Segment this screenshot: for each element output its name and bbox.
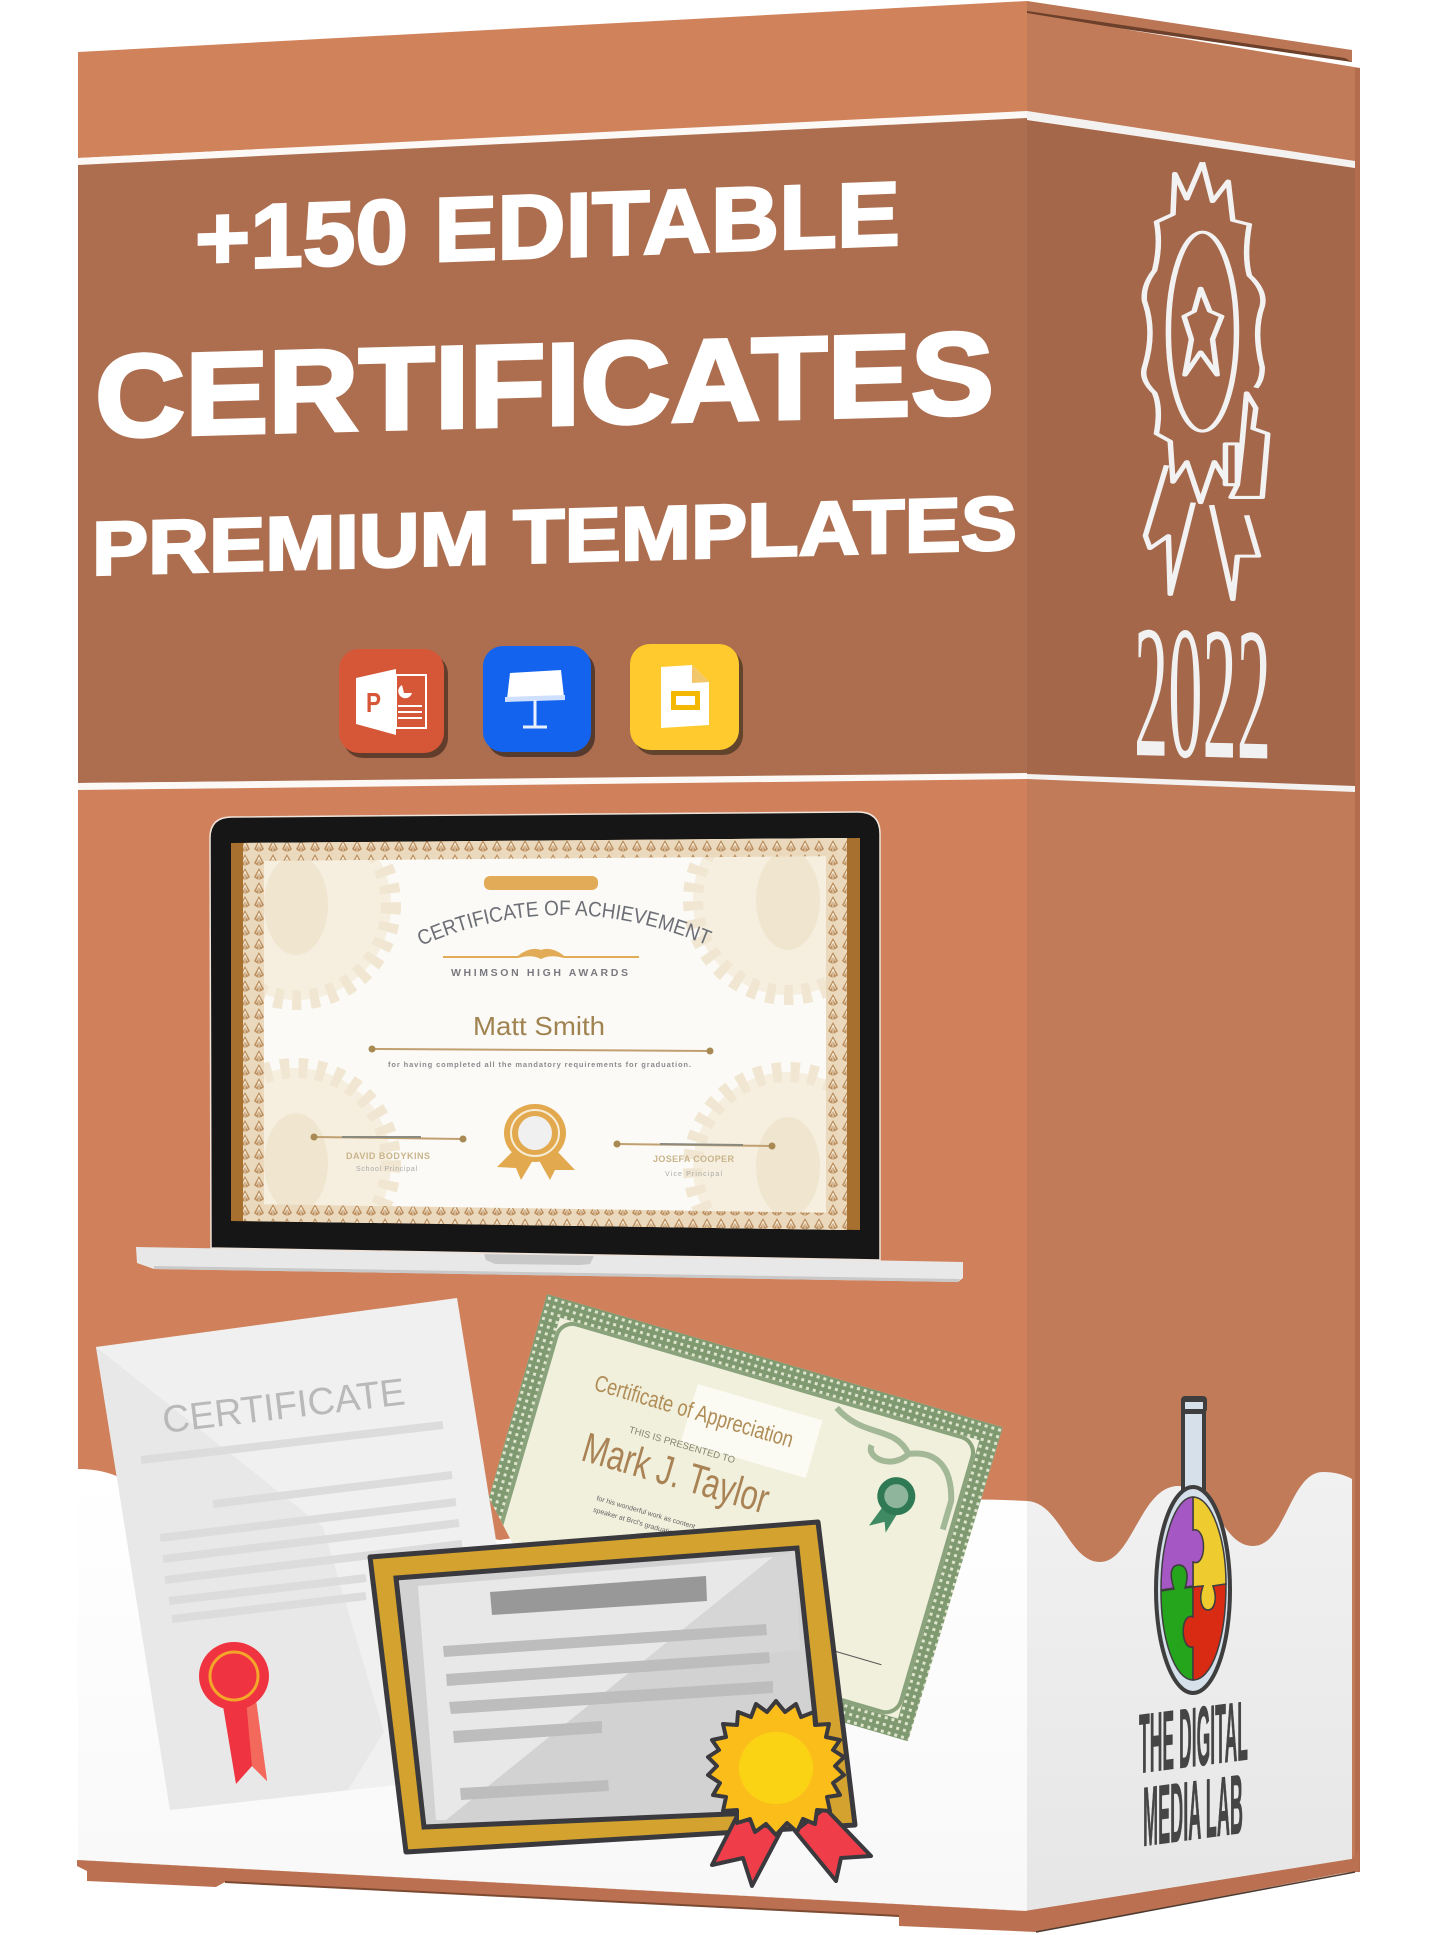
icon: google slides: [630, 644, 743, 755]
appreciation name: Mark J. Taylor: [577, 1423, 775, 1522]
inner circle: [1168, 232, 1236, 431]
green certificate of appreciation: [455, 1294, 1003, 1742]
ribbons: [1145, 465, 1259, 599]
awards line: WHIMSON HIGH AWARDS: [451, 967, 628, 979]
logo: flask with puzzle: [1156, 1396, 1230, 1693]
puzzle: purple: [1161, 1497, 1204, 1590]
gold bar: [484, 876, 598, 890]
right signature: Vice Principal: [665, 1171, 722, 1178]
signature rule: [834, 1651, 881, 1665]
green seal: [869, 1477, 916, 1532]
heading: certificates: CERTIFICATES: [95, 307, 994, 462]
right signature: [614, 1140, 776, 1178]
heading: premium templates: PREMIUM TEMPLATES: [92, 481, 1017, 592]
icon: keynote: [483, 646, 595, 757]
certificate title: CERTIFICATE OF ACHIEVEMENT: [418, 900, 712, 944]
screen: [231, 838, 860, 1230]
right signature: JOSEFA COOPER: [653, 1154, 734, 1164]
icon: award medal with thumbs up: [1144, 162, 1268, 599]
left signature: [310, 1134, 466, 1173]
box: front panel: [78, 1, 1027, 1911]
icon: powerpoint: [339, 649, 448, 758]
star: [1184, 288, 1222, 375]
paper text lines: [141, 1425, 462, 1619]
left signature: School Principal: [356, 1166, 417, 1173]
guilloche corners: [245, 838, 840, 1230]
frame title bar: [490, 1576, 707, 1615]
framed certificate: [370, 1522, 855, 1852]
name rule: [368, 1046, 714, 1054]
puzzle: yellow: [1193, 1497, 1226, 1610]
white highlight: [681, 1384, 823, 1478]
puzzle: red: [1183, 1584, 1226, 1680]
box: top flap: [1027, 1, 1352, 62]
heading: +150 editable: +150 EDITABLE: [195, 164, 900, 290]
paper heading: CERTIFICATE: [160, 1371, 407, 1442]
appreciation heading: Certificate of Appreciation: [592, 1370, 797, 1452]
presented line: THIS IS PRESENTED TO: [628, 1425, 736, 1466]
appreciation description: for his wonderful work as content: [596, 1495, 696, 1531]
puzzle: green: [1161, 1565, 1193, 1680]
description: for having completed all the mandatory requirements for graduation.: [388, 1060, 691, 1069]
left signature: DAVID BODYKINS: [346, 1151, 430, 1161]
seal: [497, 1104, 575, 1180]
certificate of achievement: [243, 838, 847, 1230]
gold rosette with red ribbons: [708, 1701, 871, 1886]
box: bottom flap: [77, 1850, 1359, 1932]
frame text lines: [443, 1624, 773, 1800]
laptop base: [136, 1247, 963, 1282]
thumb: [1225, 393, 1268, 497]
icon: powerpoint: P: [366, 687, 381, 718]
laptop bezel: [210, 812, 880, 1260]
ornament: [443, 950, 639, 958]
scroll ornament: [834, 1406, 954, 1530]
paper certificate with red seal: [96, 1298, 533, 1810]
red seal: [199, 1642, 269, 1784]
laptop: [136, 811, 963, 1282]
badge outline: [1144, 162, 1263, 503]
box: right side panel: [1025, 13, 1360, 1911]
appreciation description: speaker at Brcl's graduation: [592, 1507, 677, 1538]
recipient name: Matt Smith: [473, 1011, 605, 1041]
